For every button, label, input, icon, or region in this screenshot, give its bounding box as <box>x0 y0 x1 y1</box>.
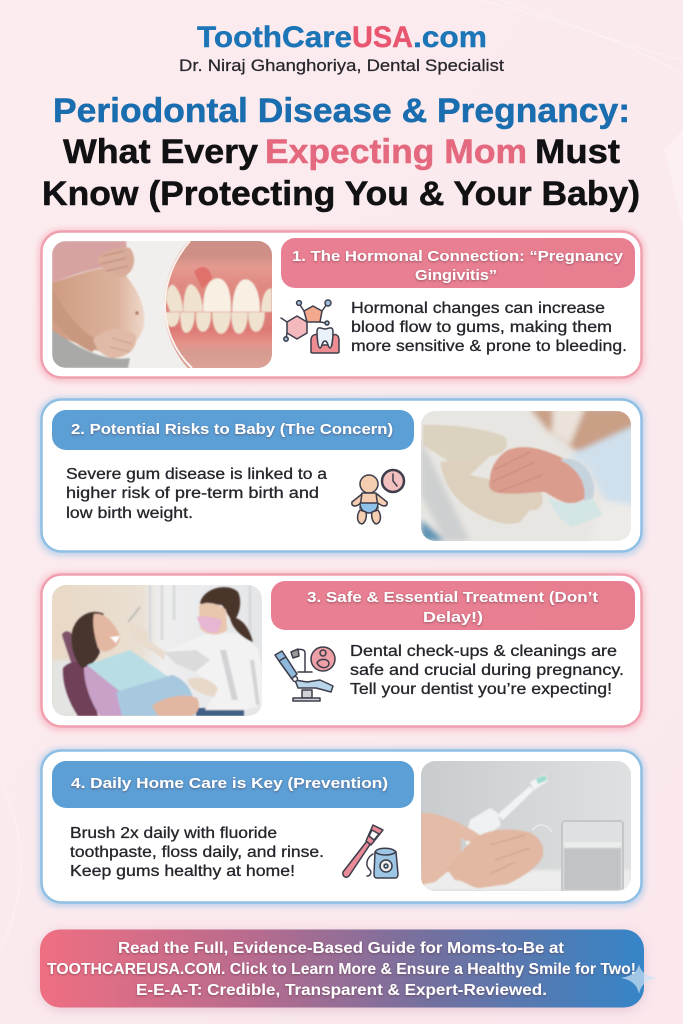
icon: hormone molecule and tooth <box>281 300 339 353</box>
call to action banner <box>40 930 657 1010</box>
heading pill 3: 3. Safe & Essential Treatment (Don’t <box>307 589 598 606</box>
icon: dental chair and pregnancy badge <box>275 647 335 701</box>
photo: toothbrush, floss and glass of water <box>421 761 631 892</box>
photo: newborn hand holding gloved finger <box>421 408 635 545</box>
photo: dentist treating pregnant patient <box>52 585 262 716</box>
body text 2: low birth weight. <box>66 505 193 522</box>
author line: Dr. Niraj Ghanghoriya, Dental Specialist <box>179 56 504 75</box>
panel: safe treatment <box>38 572 645 731</box>
body text 3: safe and crucial during pregnancy. <box>350 662 624 679</box>
body text 3: Tell your dentist you’re expecting! <box>350 681 612 698</box>
heading pill 4 <box>52 761 414 808</box>
main title: Periodontal Disease & Pregnancy: <box>53 92 630 130</box>
site name <box>197 21 487 54</box>
heading pill 3 <box>271 581 635 630</box>
body text 1: blood flow to gums, making them <box>351 319 612 336</box>
body text 2 <box>66 466 327 522</box>
body text 4 <box>70 825 324 880</box>
heading pill 2 <box>52 410 414 450</box>
body text 2: Severe gum disease is linked to a <box>66 466 327 483</box>
call to action text: TOOTHCAREUSA.COM. Click to Learn More & Ensure a Healthy Smile for Two! <box>47 961 636 978</box>
body text 4: toothpaste, floss daily, and rinse. <box>70 844 324 861</box>
heading pill 4: 4. Daily Home Care is Key (Prevention) <box>71 775 388 792</box>
call to action text <box>47 940 636 999</box>
heading pill 1: Gingivitis” <box>415 267 497 284</box>
heading pill 2: 2. Potential Risks to Baby (The Concern) <box>71 421 393 438</box>
heading pill 1 <box>281 238 635 288</box>
body text 1: Hormonal changes can increase <box>351 300 605 317</box>
site name: .com <box>413 21 487 54</box>
main title: Expecting Mom <box>265 133 527 171</box>
site name: ToothCare <box>197 21 352 54</box>
icon: toothbrush and floss <box>343 825 398 878</box>
photo: pregnant belly and inflamed gums <box>52 241 275 368</box>
site name: USA <box>352 21 413 54</box>
body text 4: Brush 2x daily with fluoride <box>70 825 277 842</box>
call to action text: E-E-A-T: Credible, Transparent & Expert-Reviewed. <box>136 982 547 999</box>
heading pill 3: Delay!) <box>423 609 483 626</box>
main title: What Every <box>63 133 258 171</box>
body text 3: Dental check-ups & cleanings are <box>350 643 617 660</box>
icon: sparkle <box>621 964 657 994</box>
main title: Know (Protecting You & Your Baby) <box>42 175 640 213</box>
body text 2: higher risk of pre-term birth and <box>66 485 319 502</box>
panel: daily home care <box>38 748 645 907</box>
call to action text: Read the Full, Evidence-Based Guide for Moms-to-Be at <box>118 940 565 957</box>
heading pill 1: 1. The Hormonal Connection: “Pregnancy <box>292 248 624 265</box>
panel: risks to baby <box>38 397 645 556</box>
main title: Must <box>535 133 620 171</box>
body text 3 <box>350 643 624 698</box>
body text 1: more sensitive & prone to bleeding. <box>351 338 627 355</box>
icon: baby and clock <box>352 470 404 524</box>
body text 1 <box>351 300 627 355</box>
header brand <box>179 21 504 75</box>
main title <box>42 92 640 213</box>
panel: hormonal connection <box>38 229 645 382</box>
body text 4: Keep gums healthy at home! <box>70 863 295 880</box>
